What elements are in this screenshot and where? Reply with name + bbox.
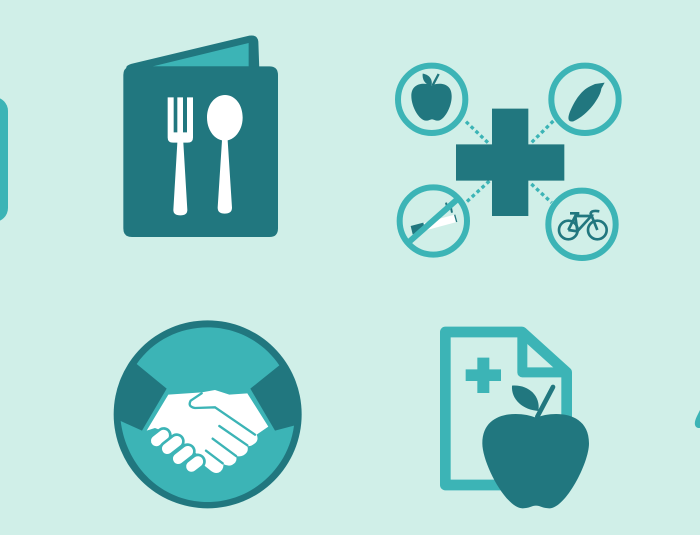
small cross <box>466 358 501 393</box>
hand outline <box>190 393 255 463</box>
page fold <box>522 335 563 372</box>
fork <box>168 97 193 215</box>
clasped hands <box>147 390 268 473</box>
apple body <box>482 414 589 508</box>
circle: no smoking <box>400 187 467 255</box>
menu back cover <box>124 35 259 75</box>
icon: cropped rounded tile at left edge <box>0 97 8 222</box>
menu inner page <box>153 43 249 66</box>
spoon <box>207 95 243 214</box>
connector dots <box>465 121 553 203</box>
icon: cropped drop at right edge <box>695 410 700 428</box>
circle: bicycle <box>548 191 616 258</box>
menu front cover <box>123 66 278 237</box>
icon: health cross with lifestyle circles <box>398 66 619 258</box>
icon: menu with fork and spoon <box>123 35 278 237</box>
icon: medical document with apple <box>445 332 589 508</box>
circle: chili pepper <box>551 66 619 133</box>
badge outer ring <box>114 320 302 508</box>
apple stem <box>537 387 553 417</box>
document outline <box>445 332 567 485</box>
circle: apple <box>398 66 465 133</box>
fingers <box>147 426 207 476</box>
apple leaf <box>512 386 539 411</box>
badge inner disc <box>121 327 294 502</box>
cross <box>456 109 564 216</box>
icon: handshake badge <box>114 320 302 508</box>
